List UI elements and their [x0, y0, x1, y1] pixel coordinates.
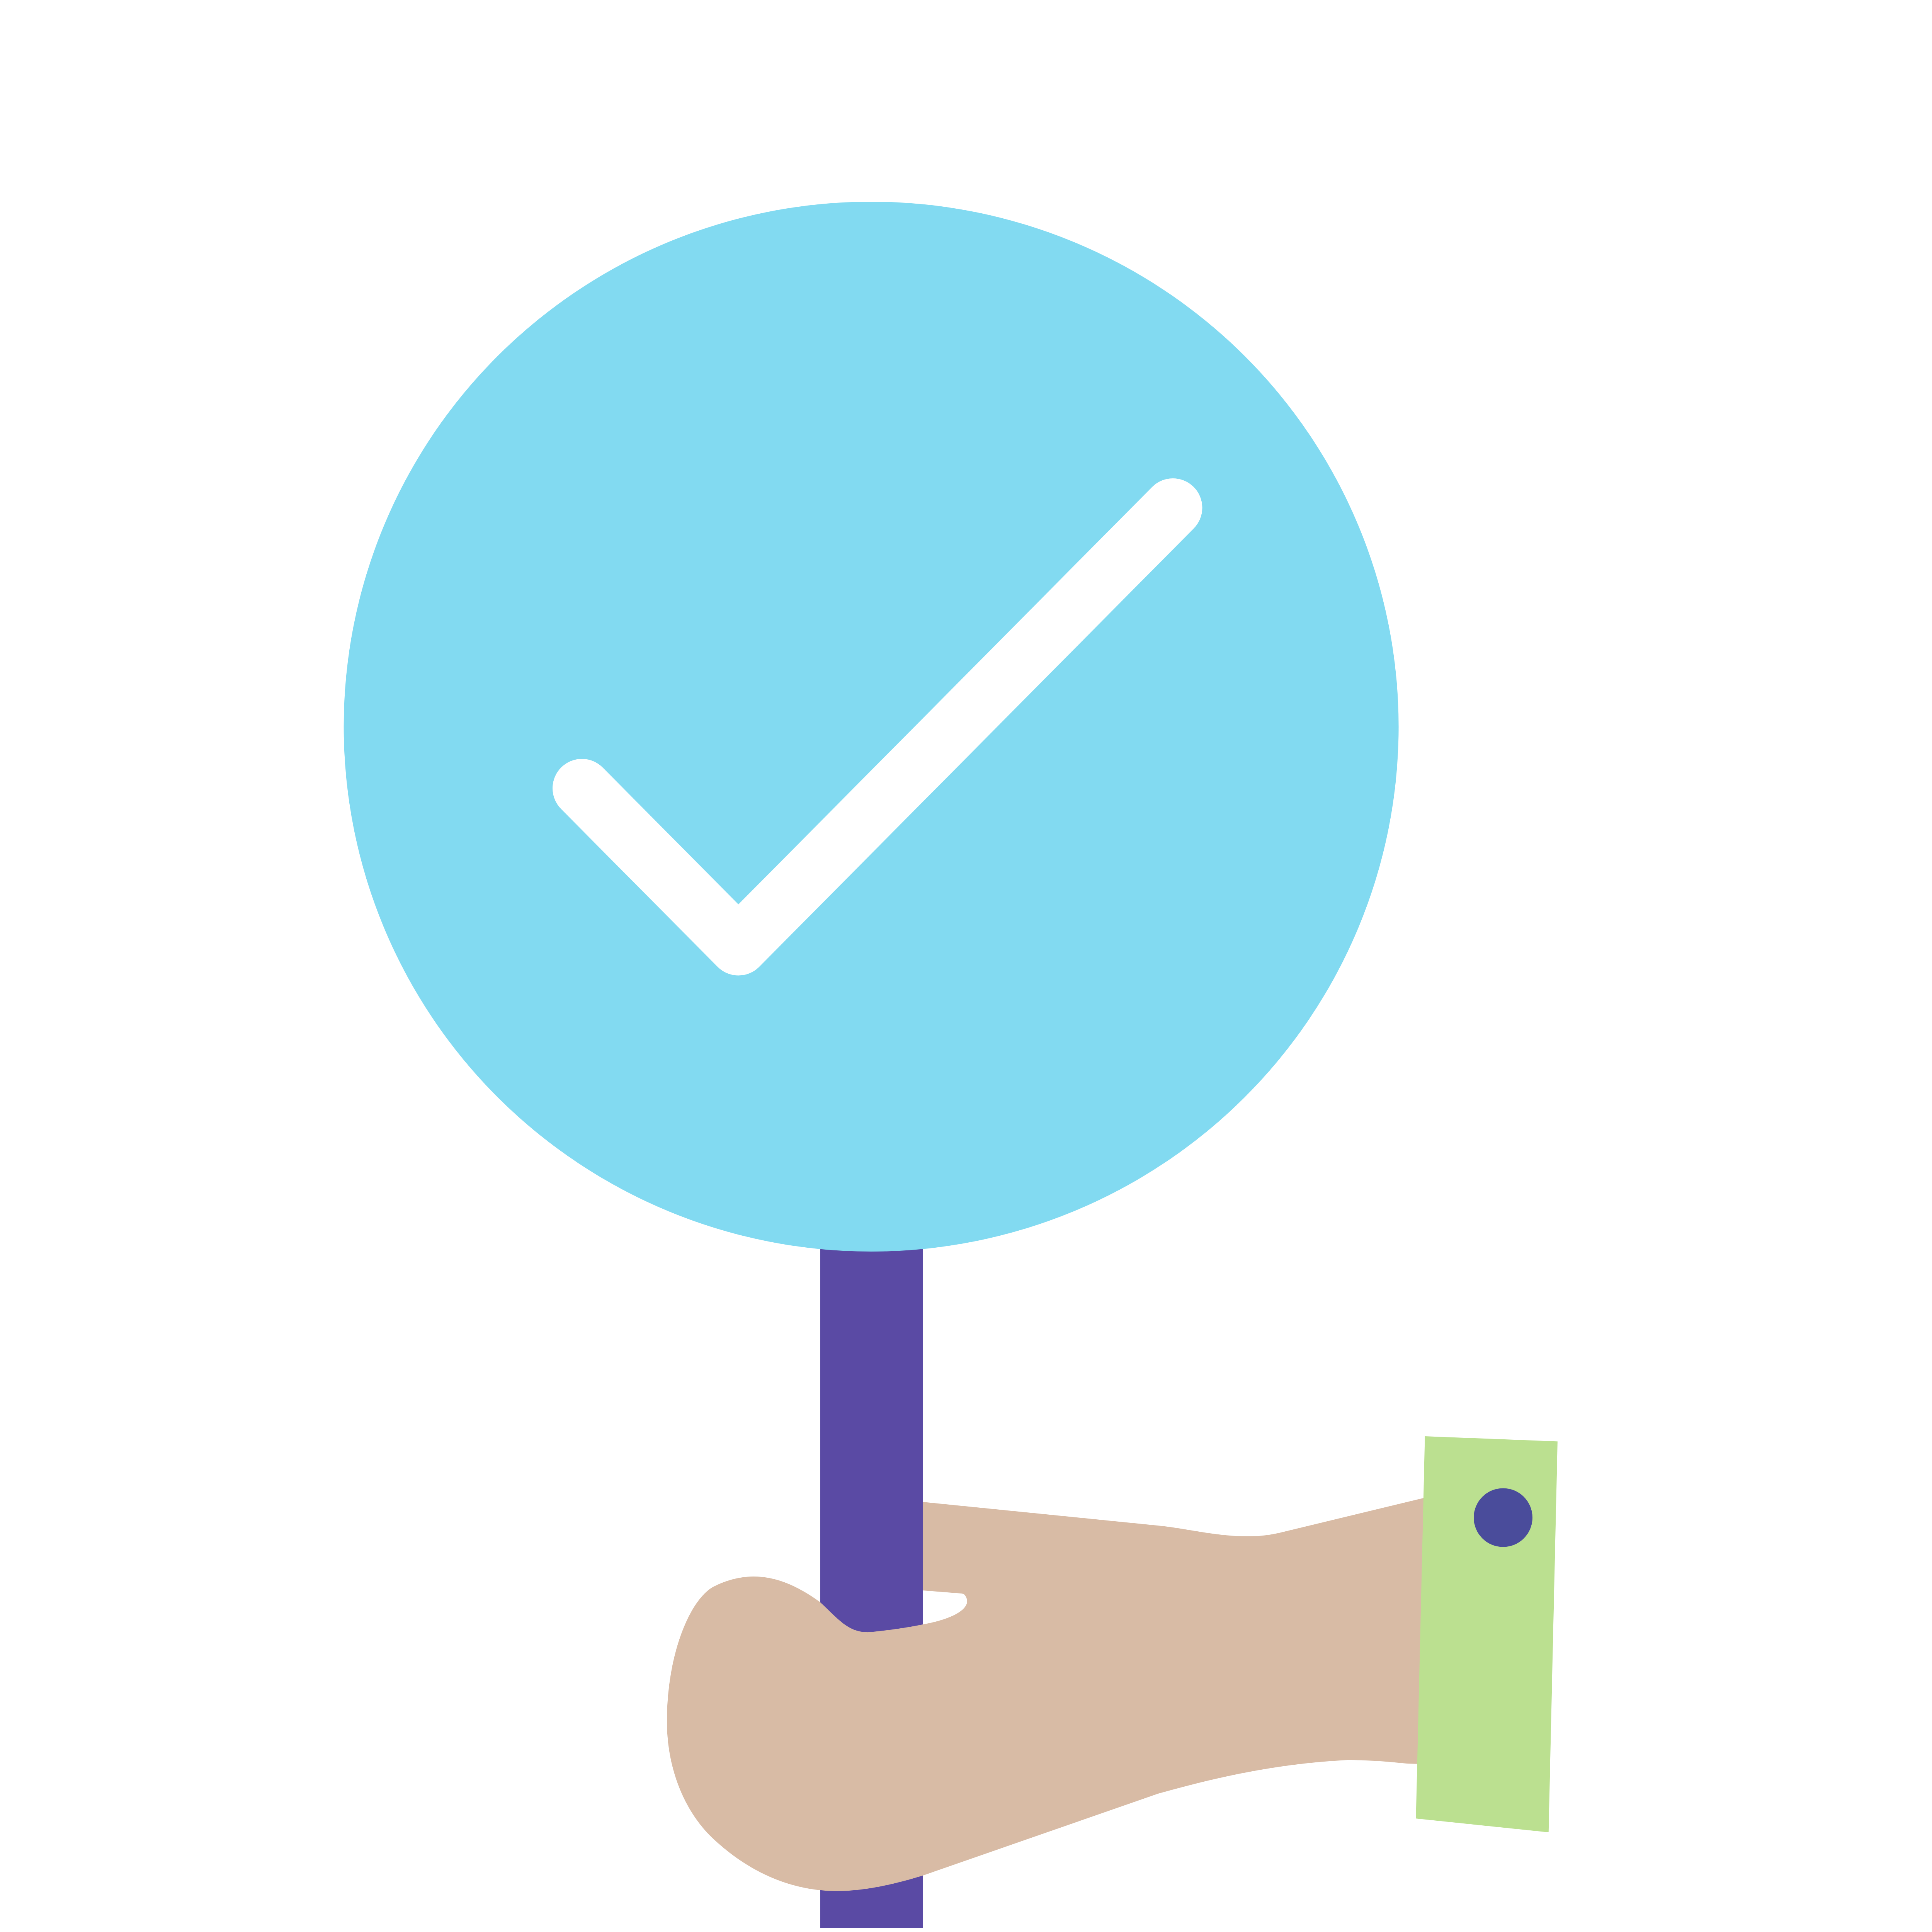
hand gripping the pole [667, 1497, 1430, 1891]
sign disc with check mark [344, 202, 1399, 1252]
icon: check mark [582, 508, 1173, 946]
sign pole [820, 1217, 923, 1928]
cuff button [1474, 1488, 1532, 1547]
shirt cuff [1416, 1436, 1558, 1832]
sign disc [344, 202, 1399, 1252]
